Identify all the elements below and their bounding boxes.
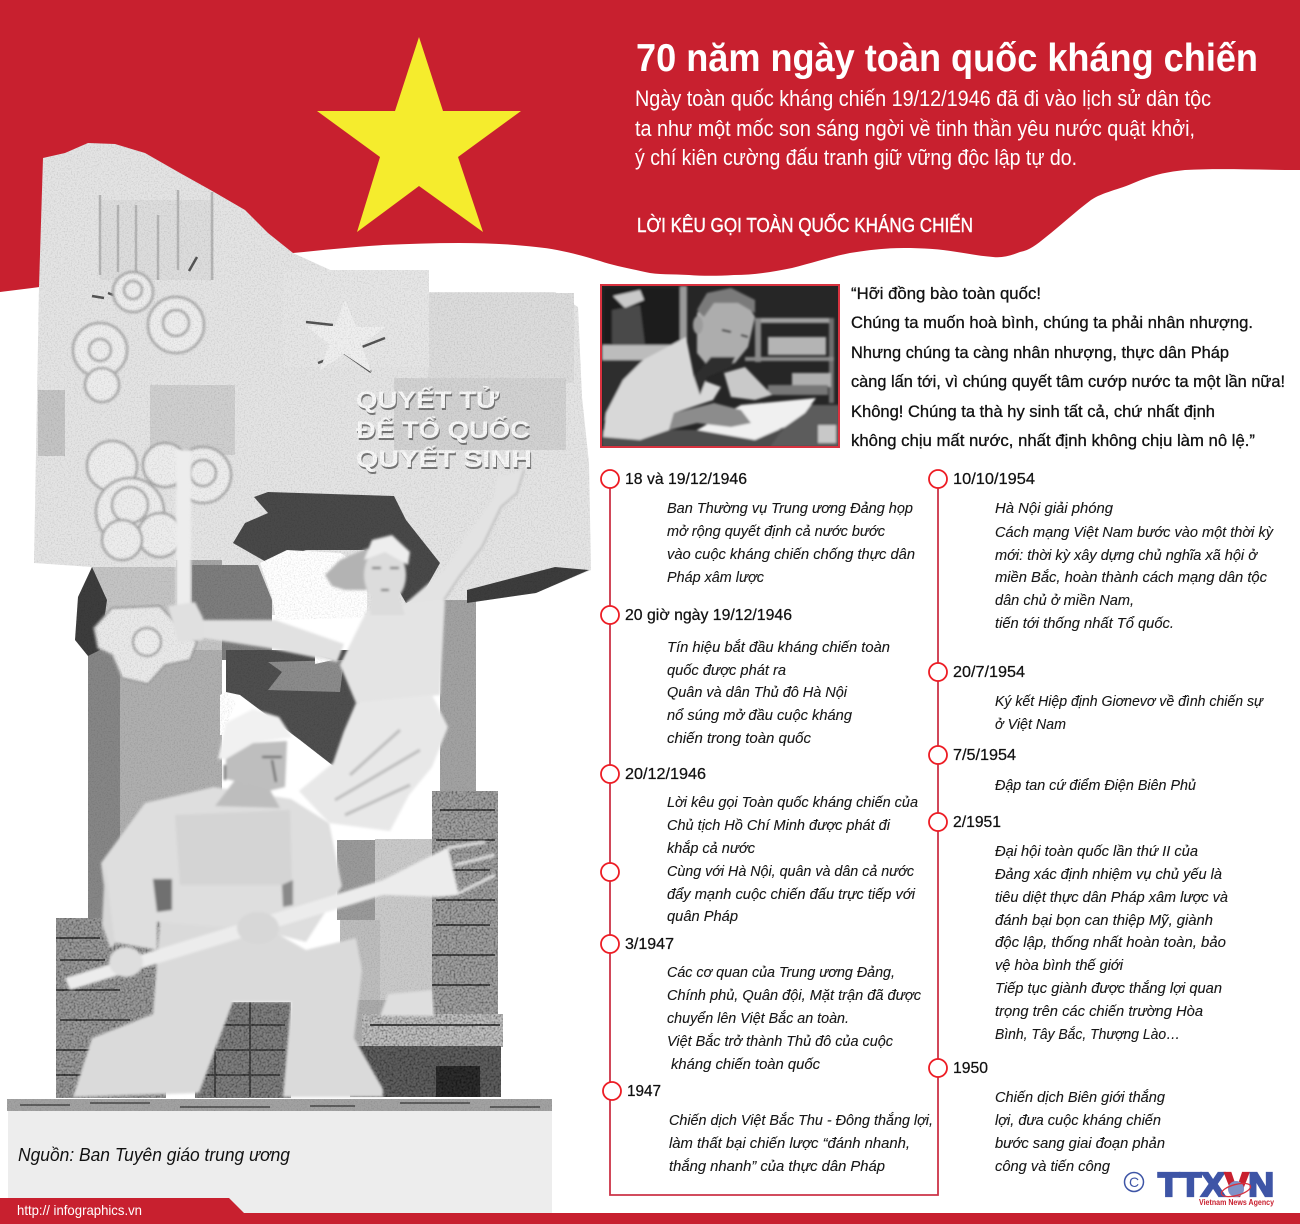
event: 20 giờ ngày 19/12/1946: nổ súng mở đầu cuộc kháng: [667, 707, 853, 724]
event: 10/10/1954: tiến tới thống nhất Tổ quốc.: [995, 615, 1174, 632]
event: 7/5/1954: [929, 746, 1197, 794]
intro paragraph: [635, 86, 1211, 170]
event: 10/10/1954: [929, 470, 1274, 632]
event: 20/12/1946: 20/12/1946: [625, 766, 706, 783]
event: 20/7/1954: ở Việt Nam: [995, 716, 1066, 733]
event: 10/10/1954: Cách mạng Việt Nam bước vào một thời kỳ: [995, 524, 1274, 541]
event: 1947: [603, 1082, 933, 1175]
event: 20/7/1954: [929, 663, 1264, 733]
event: 18 và 19/12/1946: Ban Thường vụ Trung ương Đảng họp: [667, 500, 913, 517]
monument stone structure: [7, 143, 591, 1111]
event: 3/1947: Việt Bắc trở thành Thủ đô của cuộc: [667, 1033, 893, 1050]
timeline right column: [929, 470, 1274, 1175]
logo: TTXVN agency: TTXVN: [1158, 1166, 1274, 1203]
event: 18 và 19/12/1946: vào cuộc kháng chiến chống thực dân: [667, 546, 915, 563]
event: 10/10/1954: Hà Nội giải phóng: [995, 500, 1114, 517]
photo: Ho Chi Minh writing: [601, 285, 839, 447]
relief inscription: QUYẾT TỬ: [356, 385, 499, 414]
event: 3/1947: kháng chiến toàn quốc: [671, 1056, 820, 1073]
event: 20 giờ ngày 19/12/1946: Tín hiệu bắt đầu kháng chiến toàn: [667, 639, 890, 656]
event: 20/12/1946: [601, 765, 918, 925]
event: 20/7/1954: 20/7/1954: [953, 664, 1025, 681]
event: 1947: Chiến dịch Việt Bắc Thu - Đông thắng lợi,: [669, 1112, 933, 1129]
icon: yellow star: [317, 37, 521, 232]
timeline track: [610, 479, 938, 1195]
relief inscription: ĐỂ TỔ QUỐC: [356, 416, 530, 444]
event: 1947: 1947: [627, 1083, 661, 1100]
title: 70 năm ngày toàn quốc kháng chiến: [636, 37, 1258, 80]
quote from the call to arms: “Hỡi đồng bào toàn quốc!: [851, 285, 1041, 303]
quote from the call to arms: Chúng ta muốn hoà bình, chúng ta phải nhân nhượng.: [851, 314, 1253, 332]
event: 7/5/1954: 7/5/1954: [953, 747, 1016, 764]
quote from the call to arms: Nhưng chúng ta càng nhân nhượng, thực dân Pháp: [851, 344, 1229, 362]
logo: TTXVN agency: [1124, 1166, 1274, 1207]
event: 2/1951: Bình, Tây Bắc, Thượng Lào…: [995, 1026, 1180, 1043]
event: 20 giờ ngày 19/12/1946: quốc được phát ra: [667, 662, 786, 679]
event: 20/12/1946: Chủ tịch Hồ Chí Minh được phát đi: [667, 817, 891, 834]
event: 18 và 19/12/1946: 18 và 19/12/1946: [625, 471, 747, 488]
intro paragraph: ta như một mốc son sáng ngời về tinh thần yêu nước quật khởi,: [635, 116, 1195, 141]
event: 2/1951: [929, 813, 1228, 1043]
section heading: call to arms: LỜI KÊU GỌI TOÀN QUỐC KHÁNG CHIẾN: [637, 213, 973, 237]
event: 2/1951: Đảng xác định nhiệm vụ chủ yếu là: [995, 866, 1222, 883]
relief inscription: ĐỂ TỔ QUỐC: [357, 418, 531, 446]
intro paragraph: Ngày toàn quốc kháng chiến 19/12/1946 đã đi vào lịch sử dân tộc: [635, 86, 1211, 111]
event: 18 và 19/12/1946: mở rộng quyết định cả nước bước: [667, 523, 885, 540]
event: 1950: lợi, đưa cuộc kháng chiến: [995, 1112, 1161, 1129]
relief star on the slab: [306, 300, 385, 372]
event: 3/1947: Các cơ quan của Trung ương Đảng,: [667, 964, 895, 981]
relief inscription: [356, 385, 533, 475]
soldier figure: [65, 709, 495, 1097]
event: 20/7/1954: Ký kết Hiệp định Giơnevơ về đình chiến sự: [995, 693, 1264, 710]
event: 1947: làm thất bại chiến lược “đánh nhanh,: [669, 1135, 910, 1152]
event: 1950: 1950: [953, 1060, 988, 1077]
event: 1947: thắng nhanh” của thực dân Pháp: [669, 1158, 885, 1175]
lower columns: [88, 640, 222, 920]
relief inscription: QUYẾT TỬ: [357, 387, 500, 416]
intro paragraph: ý chí kiên cường đấu tranh giữ vững độc lập tự do.: [635, 145, 1077, 170]
quote from the call to arms: càng lấn tới, vì chúng quyết tâm cướp nước ta một lần nữa!: [851, 373, 1285, 391]
event: 20/12/1946: Lời kêu gọi Toàn quốc kháng chiến của: [667, 794, 918, 811]
event: 2/1951: trọng trên các chiến trường Hòa: [995, 1003, 1203, 1020]
event: 20 giờ ngày 19/12/1946: [601, 606, 890, 747]
monument illustration: [7, 143, 591, 1111]
event: 3/1947: Chính phủ, Quân đội, Mặt trận đã được: [667, 987, 921, 1004]
event: 20 giờ ngày 19/12/1946: Quân và dân Thủ đô Hà Nội: [667, 684, 848, 701]
timeline left column: [601, 470, 933, 1175]
event: 3/1947: chuyển lên Việt Bắc an toàn.: [667, 1010, 849, 1027]
relief inscription: QUYẾT SINH: [357, 447, 533, 475]
event: 20/12/1946: Cùng với Hà Nội, quân và dân cả nước: [667, 863, 914, 880]
event: 10/10/1954: dân chủ ở miền Nam,: [995, 592, 1134, 609]
event: 7/5/1954: Đập tan cứ điểm Điện Biên Phủ: [995, 777, 1197, 794]
event: 20/12/1946: khắp cả nước: [667, 840, 755, 857]
event: 20/12/1946: quân Pháp: [667, 908, 738, 925]
logo: TTXVN agency: Vietnam News Agency: [1199, 1197, 1274, 1207]
open sky gaps: [260, 550, 367, 620]
red flag wave background: [0, 0, 1300, 292]
event: 1950: công và tiến công: [995, 1158, 1111, 1175]
event: 20 giờ ngày 19/12/1946: 20 giờ ngày 19/12/1946: [625, 607, 792, 624]
event: 2/1951: Tiếp tục giành được thắng lợi quan: [995, 980, 1222, 997]
event: 18 và 19/12/1946: Pháp xâm lược: [667, 569, 764, 586]
grey source panel: [8, 1111, 552, 1214]
event: 2/1951: Đại hội toàn quốc lần thứ II của: [995, 843, 1198, 860]
event: 3/1947: [601, 935, 921, 1073]
relief clouds: [73, 272, 231, 560]
event: 1950: [929, 1059, 1166, 1175]
event: 20/12/1946: đẩy mạnh cuộc chiến đấu trực tiếp với: [667, 886, 916, 903]
relief cloud beside the hand: [94, 606, 197, 684]
quote from the call to arms: không chịu mất nước, nhất định không chịu làm nô lệ.”: [851, 432, 1255, 450]
dark recess behind figures: [233, 492, 440, 603]
brickwork: [56, 791, 503, 1098]
event: 10/10/1954: miền Bắc, hoàn thành cách mạng dân tộc: [995, 569, 1267, 586]
event: 2/1951: 2/1951: [953, 814, 1001, 831]
event: 3/1947: 3/1947: [625, 936, 674, 953]
event: 2/1951: vệ hòa bình thế giới: [995, 957, 1124, 974]
website link: http:// infographics.vn: [17, 1202, 142, 1218]
flag slab: [34, 143, 591, 615]
relief inscription: QUYẾT SINH: [356, 445, 532, 473]
source note: Nguồn: Ban Tuyên giáo trung ương: [18, 1145, 290, 1165]
event: 1950: bước sang giai đoạn phản: [995, 1135, 1165, 1152]
event: 10/10/1954: mới: thời kỳ xây dựng chủ nghĩa xã hội ở: [995, 547, 1259, 564]
quote from the call to arms: [851, 285, 1285, 450]
logo: TTXVN agency: C: [1129, 1174, 1139, 1190]
event: 18 và 19/12/1946: [601, 470, 915, 586]
event: 2/1951: tiêu diệt thực dân Pháp xâm lược và: [995, 889, 1228, 906]
quote from the call to arms: Không! Chúng ta thà hy sinh tất cả, chứ nhất định: [851, 403, 1215, 421]
footer bar: [0, 1198, 1300, 1224]
event: 20 giờ ngày 19/12/1946: chiến trong toàn quốc: [667, 730, 811, 747]
event: 2/1951: đánh bại bọn can thiệp Mỹ, giành: [995, 912, 1213, 929]
event: 1950: Chiến dịch Biên giới thắng: [995, 1089, 1166, 1106]
event: 2/1951: độc lập, thống nhất hoàn toàn, bảo: [995, 934, 1226, 951]
event: 10/10/1954: 10/10/1954: [953, 471, 1035, 488]
woman figure: [168, 450, 524, 1016]
